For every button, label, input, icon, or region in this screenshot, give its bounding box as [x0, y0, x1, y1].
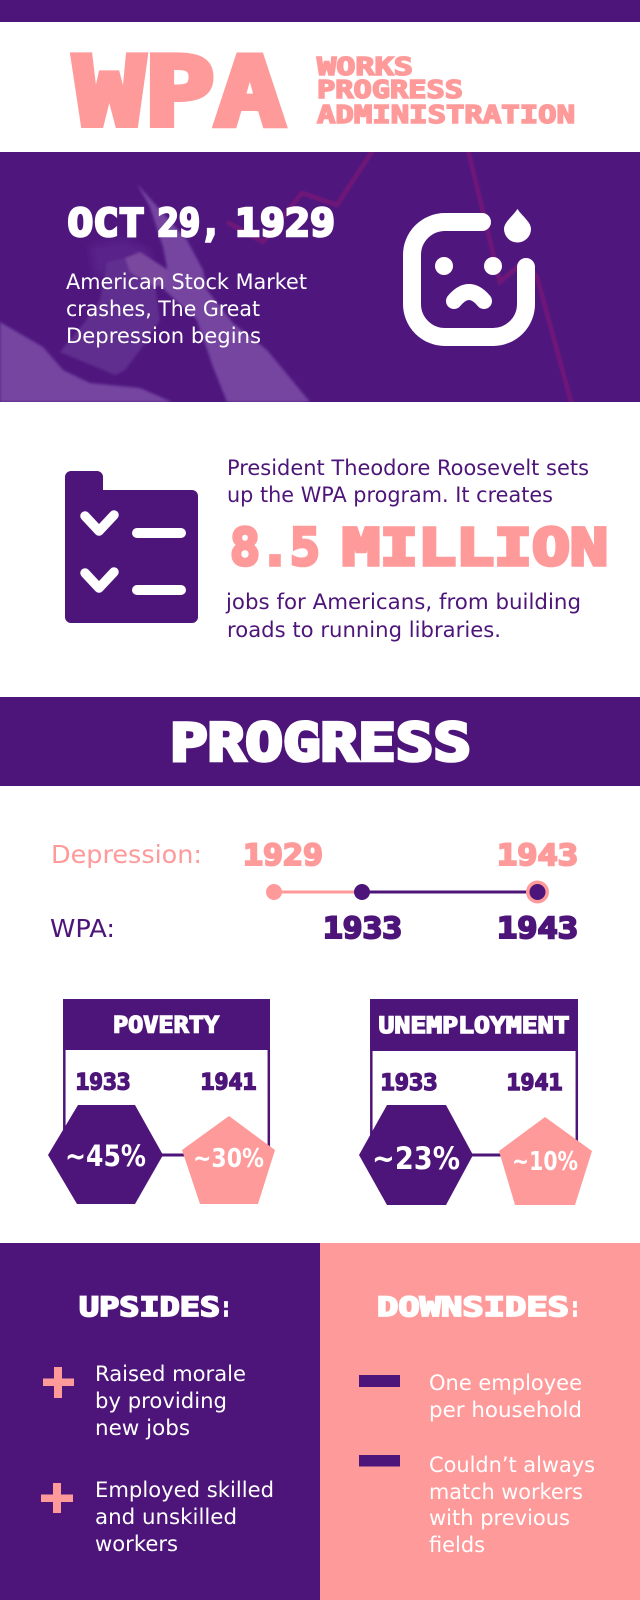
hexagon: 1933 unemployment — [359, 1105, 473, 1205]
icon: minus — [359, 1375, 400, 1387]
date heading: 1929 — [235, 201, 335, 245]
timeline line and dots — [266, 880, 549, 904]
hexagon: 1933 poverty: ~45% — [65, 1139, 146, 1173]
panel: WPA program jobs — [65, 456, 608, 643]
heading: downsides: DOWNSIDES — [377, 1292, 569, 1323]
downside: mismatched workers — [429, 1453, 595, 1558]
crash description: American Stock Market — [66, 270, 307, 295]
upside: raised morale: new jobs — [95, 1416, 190, 1441]
pentagon: 1941 unemployment: ~10% — [512, 1147, 578, 1177]
label: depression: Depression: — [51, 840, 202, 869]
program intro text: President Theodore Roosevelt sets — [227, 456, 589, 481]
subtitle: works progress administration: WORKS — [317, 52, 413, 81]
upside: raised morale: Raised morale — [95, 1362, 246, 1387]
icon: sad sweating face — [412, 209, 531, 337]
panel: progress heading band — [0, 697, 640, 786]
crash description: Depression begins — [66, 324, 261, 349]
upside: raised morale — [95, 1362, 246, 1441]
top bar — [0, 0, 640, 22]
date heading — [68, 201, 335, 245]
year: depression start and end — [243, 838, 578, 872]
card: poverty: POVERTY — [113, 1014, 220, 1038]
card: unemployment — [359, 999, 592, 1205]
card: poverty: 1933 — [76, 1070, 130, 1096]
pentagon: 1941 unemployment — [499, 1117, 592, 1205]
label: WPA: WPA: — [50, 914, 115, 943]
downside: one employee — [429, 1371, 582, 1423]
date heading: OCT — [68, 201, 144, 245]
timeline: depression and WPA years — [50, 838, 578, 945]
year: depression start and end: 1929 — [243, 838, 323, 872]
hexagon: 1933 poverty — [48, 1105, 163, 1204]
subtitle: works progress administration — [317, 52, 575, 129]
downside: mismatched workers: with previous — [429, 1506, 570, 1531]
big number: 8.5 million: MILLION — [342, 519, 608, 578]
upside: employed workers: workers — [95, 1532, 178, 1557]
year: WPA start and end: 1933 — [323, 911, 402, 945]
card: unemployment: 1933 — [380, 1071, 438, 1096]
downside: mismatched workers: match workers — [429, 1480, 583, 1505]
icon: checklist folder — [65, 471, 198, 623]
card: unemployment: UNEMPLOYMENT — [378, 1014, 570, 1039]
card: unemployment: 1941 — [506, 1071, 562, 1096]
year: WPA start and end — [323, 911, 578, 945]
upside: raised morale: by providing — [95, 1389, 227, 1414]
crash description: crashes, The Great — [66, 297, 260, 322]
downside: mismatched workers: fields — [429, 1533, 485, 1558]
crash description — [66, 270, 307, 349]
panel: upsides — [0, 1243, 320, 1600]
upside: employed workers: and unskilled — [95, 1505, 237, 1530]
background photo: man holding head and falling chart — [0, 150, 572, 405]
subtitle: works progress administration: ADMINISTRATION — [317, 100, 575, 129]
upside: employed workers — [95, 1478, 274, 1557]
pentagon: 1941 poverty — [182, 1116, 275, 1204]
program intro text: up the WPA program. It creates — [227, 483, 553, 508]
jobs description: roads to running libraries. — [227, 618, 501, 643]
big number: 8.5 million: 8.5 — [230, 519, 320, 578]
title: WPA: WPA — [74, 38, 285, 148]
program intro text — [227, 456, 589, 508]
heading: downsides: : — [570, 1292, 580, 1323]
card: poverty — [48, 999, 275, 1204]
subtitle: works progress administration: PROGRESS — [317, 75, 463, 104]
upside: employed workers: Employed skilled — [95, 1478, 274, 1503]
downside: one employee: per household — [429, 1398, 582, 1423]
title block — [74, 38, 575, 148]
panel: downsides — [320, 1243, 640, 1600]
jobs description: jobs for Americans, from building — [225, 590, 581, 615]
heading: upsides: UPSIDES — [79, 1292, 220, 1323]
pentagon: 1941 poverty: ~30% — [193, 1144, 264, 1174]
panel: progress heading band: PROGRESS — [170, 714, 471, 774]
icon: minus — [359, 1455, 400, 1466]
year: depression start and end: 1943 — [497, 838, 578, 872]
big number: 8.5 million — [230, 519, 608, 578]
icon: plus — [43, 1367, 74, 1398]
panel: stock market crash hero — [0, 150, 640, 405]
downside: mismatched workers: Couldn’t always — [429, 1453, 595, 1478]
jobs description — [225, 590, 581, 643]
heading: upsides: : — [221, 1292, 231, 1323]
card: poverty: 1941 — [200, 1070, 256, 1096]
date heading: 29, — [158, 201, 222, 245]
icon: plus — [41, 1483, 73, 1513]
year: WPA start and end: 1943 — [497, 911, 578, 945]
downside: one employee: One employee — [429, 1371, 582, 1396]
hexagon: 1933 unemployment: ~23% — [372, 1141, 460, 1177]
